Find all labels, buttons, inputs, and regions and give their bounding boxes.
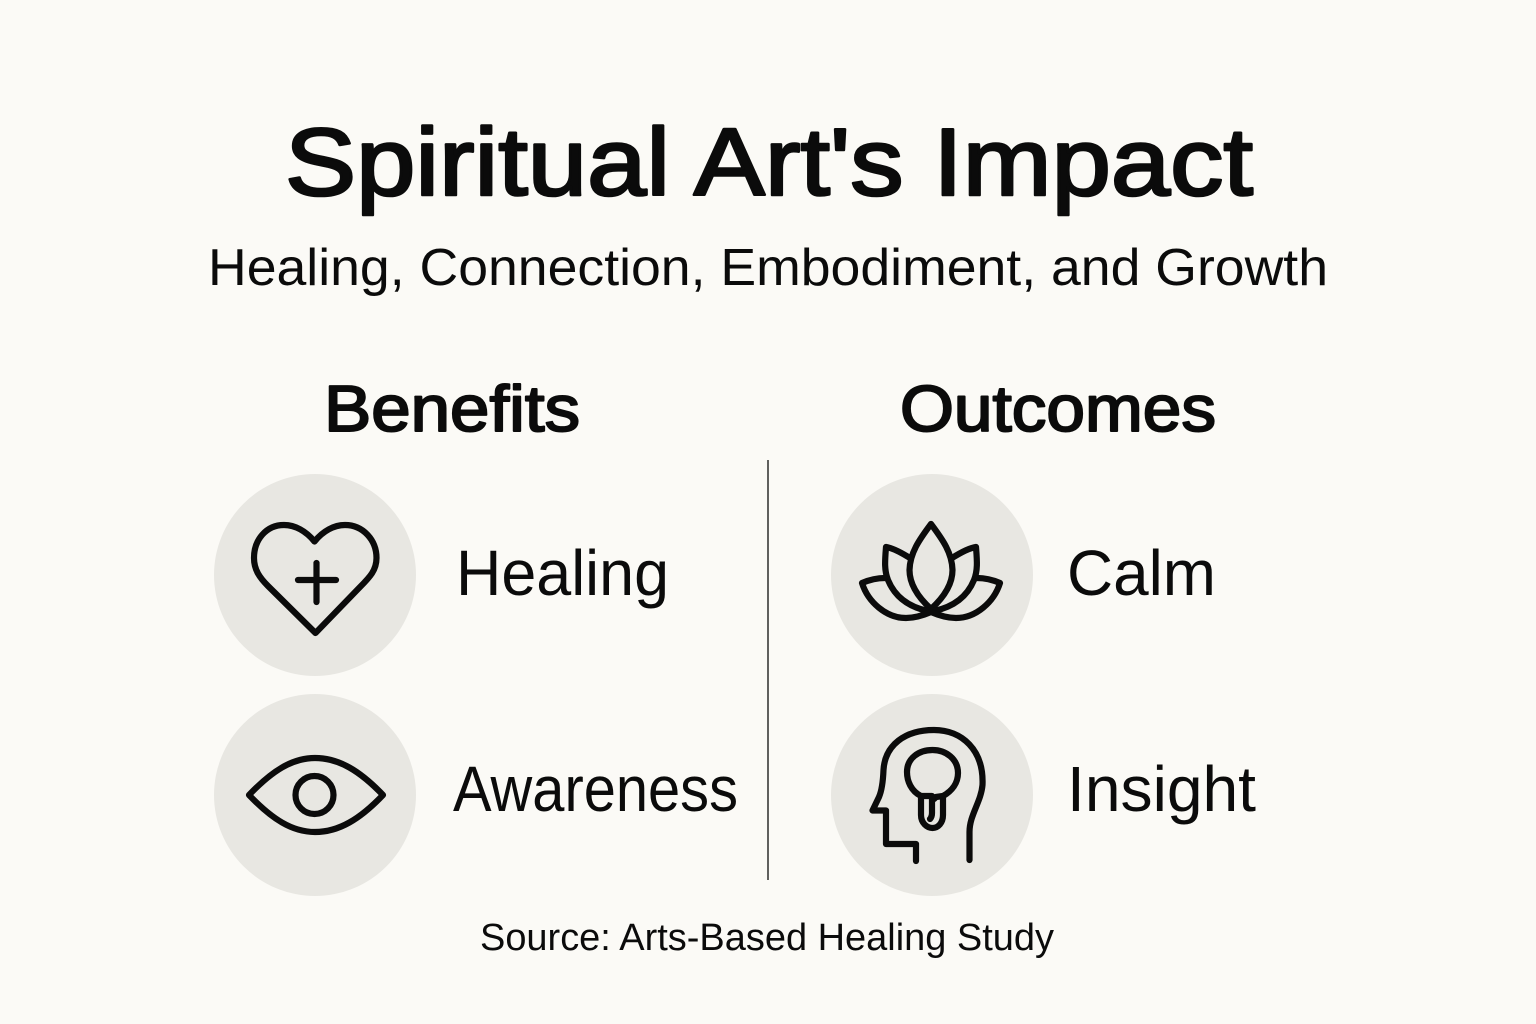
benefit: healing	[214, 474, 669, 676]
label: healing: Healing	[456, 537, 669, 609]
benefit: awareness	[214, 694, 738, 896]
heading: benefits: Benefits	[324, 372, 580, 445]
icon: heart with plus	[214, 474, 416, 676]
outcome: calm	[831, 474, 1216, 676]
icon: head with lightbulb	[831, 694, 1033, 896]
source note: Source: Arts-Based Healing Study	[480, 917, 1054, 959]
heading: outcomes: Outcomes	[900, 372, 1216, 445]
subtitle: Healing, Connection, Embodiment, and Growth	[208, 239, 1328, 297]
label: calm: Calm	[1067, 537, 1216, 609]
label: awareness: Awareness	[453, 753, 738, 825]
icon: eye	[214, 694, 416, 896]
icon: lotus	[831, 474, 1033, 676]
title: Spiritual Art's Impact	[285, 109, 1253, 216]
outcome: insight	[831, 694, 1256, 896]
label: insight: Insight	[1067, 753, 1256, 825]
